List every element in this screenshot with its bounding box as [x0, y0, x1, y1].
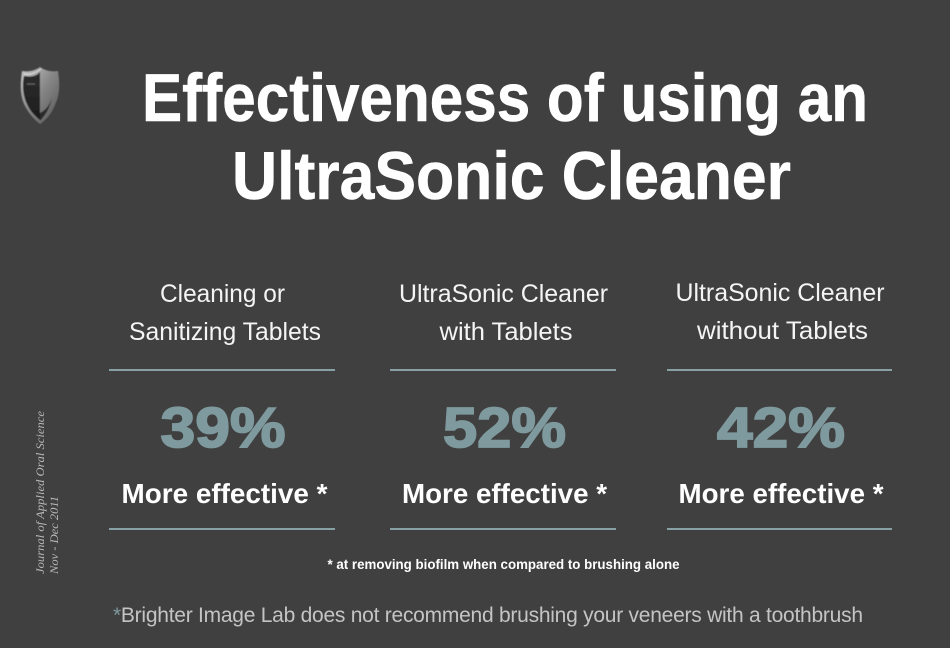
panel: ultrasonic cleaner with tablets: [390, 280, 616, 530]
label more effective: More effective *: [402, 478, 607, 509]
rotated citation: journal source: Journal of Applied Oral Science: [33, 410, 47, 574]
column heading: [676, 279, 884, 345]
footnote: biofilm comparison: * at removing biofilm when compared to brushing alone: [328, 556, 680, 572]
title: [142, 60, 868, 214]
rotated citation: journal source: Nov - Dec 2011: [47, 496, 61, 575]
panel: cleaning or sanitizing tablets: [109, 280, 335, 530]
title: Effectiveness of using an: [142, 60, 868, 136]
column heading: Sanitizing Tablets: [129, 318, 321, 346]
rotated citation: journal source: [33, 410, 61, 575]
statistic 42%: 42%: [717, 396, 845, 460]
icon: shield logo: [21, 67, 59, 124]
column heading: UltraSonic Cleaner: [399, 280, 608, 308]
column heading: without Tablets: [696, 317, 868, 345]
label more effective: More effective *: [678, 478, 884, 509]
column heading: with Tablets: [438, 318, 572, 346]
statistic 52%: 52%: [443, 396, 566, 460]
column heading: [129, 280, 321, 346]
label more effective: More effective *: [122, 478, 328, 509]
statistic 39%: 39%: [160, 396, 286, 460]
title: UltraSonic Cleaner: [232, 138, 791, 214]
panel: ultrasonic cleaner without tablets: [667, 279, 892, 530]
column heading: Cleaning or: [160, 280, 285, 308]
column heading: UltraSonic Cleaner: [676, 279, 884, 307]
disclaimer: *Brighter Image Lab does not recommend brushing your veneers with a toothbrush: [113, 604, 863, 627]
column heading: [399, 280, 608, 346]
